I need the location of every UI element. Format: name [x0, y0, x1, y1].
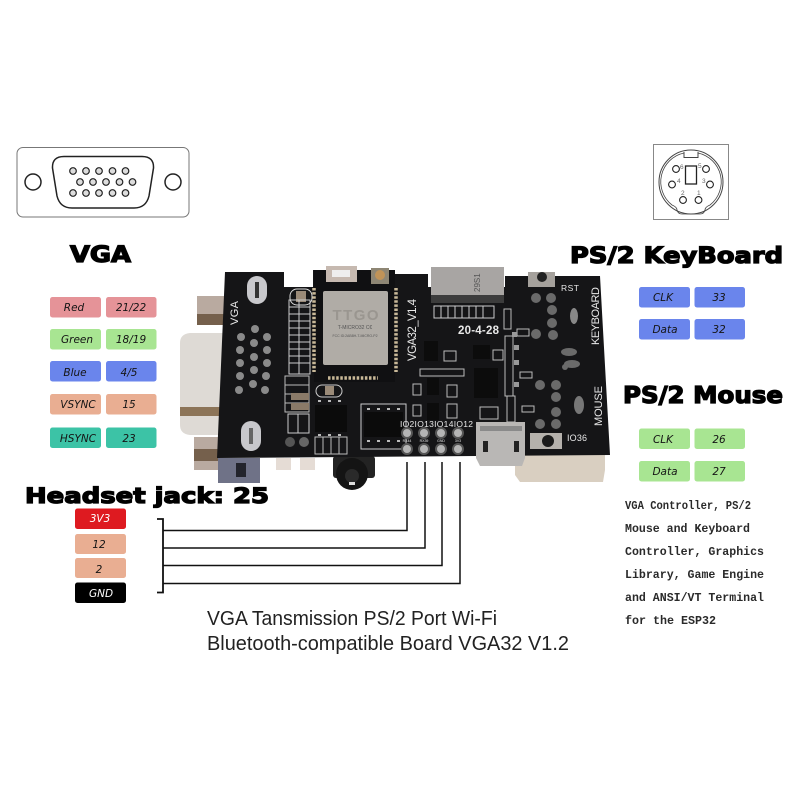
panel: VGA pin table: 4/5: [121, 367, 138, 379]
photo: VGA32 circuit board: RST: [561, 283, 579, 293]
photo: VGA32 circuit board: TTGO: [332, 307, 379, 324]
product title: Bluetooth-compatible Board VGA32 V1.2: [207, 633, 569, 655]
panel: keyboard pin table: [639, 287, 745, 340]
panel: keyboard pin table: 33: [712, 292, 726, 304]
panel: VGA pin table: HSYNC: [60, 433, 97, 445]
icon: PS/2 connector diagram: 4: [677, 178, 681, 185]
panel: VGA pin table: Blue: [63, 367, 87, 379]
panel: mouse pin table: CLK: [653, 434, 674, 446]
icon: PS/2 connector diagram: [654, 144, 728, 220]
photo: VGA32 circuit board: VGA32_V1.4: [407, 298, 419, 361]
icon: PS/2 connector diagram: 5: [698, 163, 702, 170]
product title: [207, 608, 569, 655]
heading: PS/2 Mouse: PS/2 Mouse: [623, 383, 783, 409]
photo: VGA32 circuit board: 29S1: [473, 273, 482, 292]
panel: headset pin table: [75, 508, 126, 603]
panel: VGA pin table: 18/19: [116, 334, 146, 346]
description text: for the ESP32: [625, 614, 716, 628]
description text: Controller, Graphics: [625, 545, 764, 559]
mounting holes: [247, 276, 267, 304]
panel: VGA pin table: [50, 297, 156, 448]
heading: VGA: VGA: [70, 243, 131, 268]
VGA solder pads: [235, 325, 271, 394]
description text: and ANSI/VT Terminal: [625, 591, 764, 605]
panel: headset pin table: 3V3: [90, 513, 110, 525]
panel: headset pin table: GND: [89, 588, 113, 600]
photo: VGA32 circuit board: [180, 266, 610, 490]
heading: PS/2 KeyBoard: PS/2 KeyBoard: [570, 244, 783, 269]
panel: keyboard pin table: Data: [652, 324, 678, 336]
photo: VGA32 circuit board: IO36: [567, 433, 587, 443]
panel: headset pin table: 12: [92, 539, 106, 551]
description text: Library, Game Engine: [625, 568, 764, 582]
photo: VGA32 circuit board: 20-4-28: [458, 325, 500, 337]
panel: keyboard pin table: CLK: [653, 292, 674, 304]
board silk text: VGA: [229, 300, 241, 325]
icon: PS/2 connector diagram: 3: [702, 178, 706, 185]
SMD parts: [424, 341, 498, 420]
panel: mouse pin table: Data: [652, 466, 678, 478]
icon: PS/2 connector diagram: 2: [681, 190, 685, 197]
panel: VGA pin table: Green: [61, 334, 93, 346]
panel: VGA pin table: 23: [122, 433, 136, 445]
photo: VGA32 circuit board: RX39: [420, 439, 428, 443]
description text: [625, 499, 764, 628]
wiring from headset pins to board pads: [157, 462, 460, 592]
micro USB socket: [476, 422, 525, 466]
VGA socket metal: [197, 296, 227, 325]
icon: VGA connector diagram: [17, 148, 189, 217]
ESP32 module: [314, 270, 395, 382]
PS/2 housing: [515, 455, 605, 482]
blue socket, white pins, audio jack: [218, 458, 260, 483]
product title: VGA Tansmission PS/2 Port Wi-Fi: [207, 608, 497, 630]
heading: Headset jack: Headset jack: 25: [25, 484, 269, 508]
photo: VGA32 circuit board: GND: [437, 439, 445, 443]
icon: PS/2 connector diagram: 6: [680, 164, 684, 171]
test pads: [402, 428, 463, 454]
ICs: [316, 385, 342, 397]
photo: VGA32 circuit board: RX44: [403, 439, 411, 443]
description text: VGA Controller, PS/2: [625, 499, 751, 513]
panel: headset pin table: 2: [96, 564, 103, 576]
SD card slot: [431, 267, 504, 295]
photo: VGA32 circuit board: FCC ID:2AB8H-T-MICRO-P2: [332, 334, 378, 338]
photo: VGA32 circuit board: IO2IO13IO14IO12: [400, 419, 473, 429]
reset and IO36 buttons: [528, 272, 555, 287]
icon: PS/2 connector diagram: 1: [697, 190, 701, 197]
photo: VGA32 circuit board: 3V3: [455, 439, 461, 443]
panel: mouse pin table: [639, 428, 745, 482]
panel: VGA pin table: VSYNC: [60, 399, 96, 411]
panel: VGA pin table: 21/22: [116, 302, 146, 314]
PCB outline: [217, 270, 610, 458]
panel: mouse pin table: 27: [712, 466, 726, 478]
photo: VGA32 circuit board: T-MICRO32 C€: [338, 325, 372, 331]
header strip: [290, 289, 312, 305]
panel: VGA pin table: 15: [122, 399, 136, 411]
photo: VGA32 circuit board: KEYBOARD: [590, 287, 602, 345]
panel: VGA pin table: Red: [64, 302, 85, 314]
photo: VGA32 circuit board: MOUSE: [593, 386, 605, 426]
panel: mouse pin table: 26: [712, 434, 726, 446]
panel: keyboard pin table: 32: [712, 324, 726, 336]
description text: Mouse and Keyboard: [625, 522, 750, 536]
PS/2 solder pads: [531, 293, 584, 429]
